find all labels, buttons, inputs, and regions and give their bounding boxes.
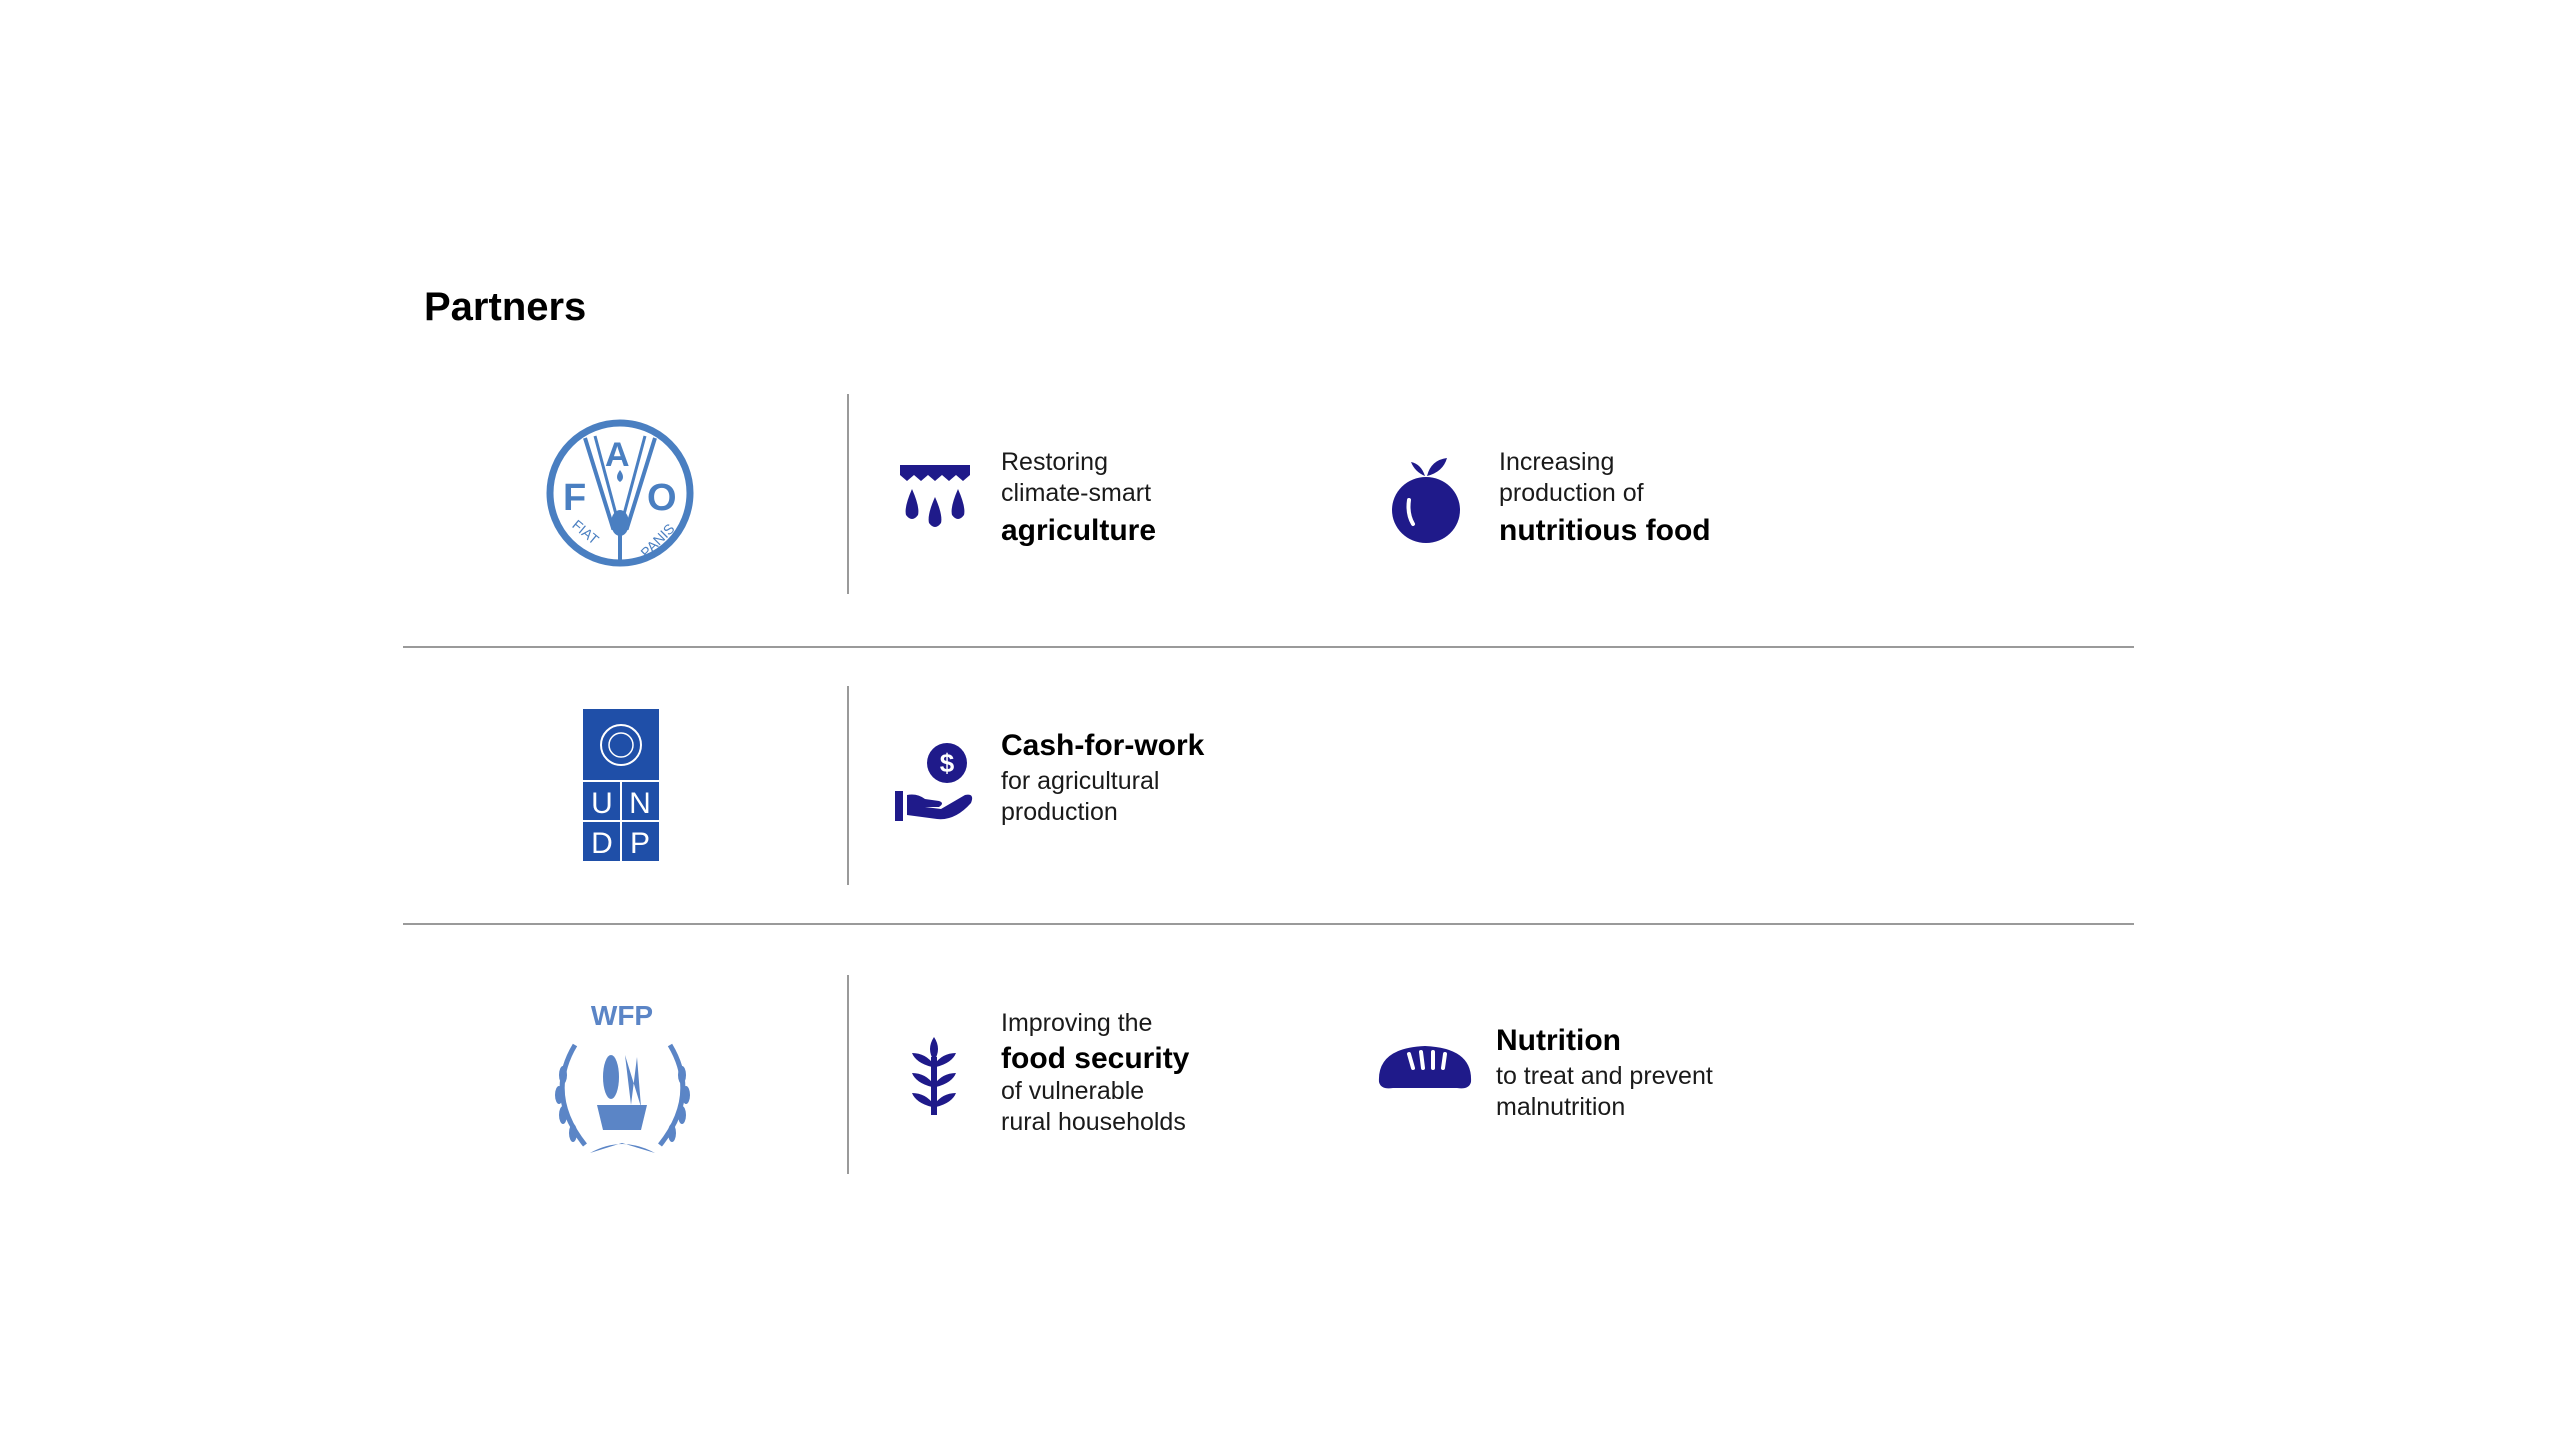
- logo: FAO: O: [647, 477, 677, 519]
- logo: UNDP: D: [591, 827, 613, 860]
- text: food security: [1001, 1009, 1190, 1136]
- icon: fruit: [1392, 458, 1460, 543]
- text: food security: food security: [1001, 1042, 1189, 1075]
- logo: FAO: F: [563, 477, 586, 519]
- logo: FAO: [546, 420, 694, 566]
- logo: FAO: FIAT: [569, 516, 602, 548]
- logo: FAO: PANIS: [637, 520, 678, 561]
- logo: UNDP: N: [629, 787, 651, 820]
- logo: UNDP: P: [630, 827, 650, 860]
- text: nutritious food: nutritious food: [1499, 514, 1711, 547]
- logo: FAO: A: [605, 436, 630, 474]
- text: nutrition: to treat and prevent: [1496, 1062, 1713, 1090]
- text: cash-for-work: production: [1001, 798, 1118, 826]
- text: restoring agriculture: agriculture: [1001, 514, 1156, 547]
- text: nutritious food: [1499, 448, 1711, 547]
- text: nutrition: [1496, 1024, 1713, 1121]
- text: cash-for-work: Cash-for-work: [1001, 729, 1204, 762]
- text: restoring agriculture: [1001, 448, 1156, 547]
- text: cash-for-work: for agricultural: [1001, 767, 1159, 795]
- text: nutrition: Nutrition: [1496, 1024, 1621, 1057]
- text: restoring agriculture: climate-smart: [1001, 479, 1151, 507]
- icon: bread: [1378, 1046, 1472, 1088]
- icon: drops (climate-smart agriculture): [900, 465, 970, 527]
- icon: cash in hand: [895, 743, 972, 821]
- logo: WFP: [555, 1000, 690, 1153]
- icon: wheat: [912, 1037, 956, 1115]
- text: food security: rural households: [1001, 1108, 1186, 1136]
- logo: WFP: WFP: [591, 1000, 653, 1031]
- logo: UNDP: U: [591, 787, 613, 820]
- text: nutrition: malnutrition: [1496, 1093, 1625, 1121]
- text: food security: of vulnerable: [1001, 1077, 1144, 1105]
- text: nutritious food: production of: [1499, 479, 1644, 507]
- icon: cash in hand: $: [940, 748, 955, 778]
- text: cash-for-work: [1001, 729, 1204, 826]
- text: restoring agriculture: Restoring: [1001, 448, 1108, 476]
- title: Partners: [424, 285, 586, 329]
- text: nutritious food: Increasing: [1499, 448, 1614, 476]
- text: food security: Improving the: [1001, 1009, 1152, 1037]
- logo: UNDP: [583, 709, 659, 861]
